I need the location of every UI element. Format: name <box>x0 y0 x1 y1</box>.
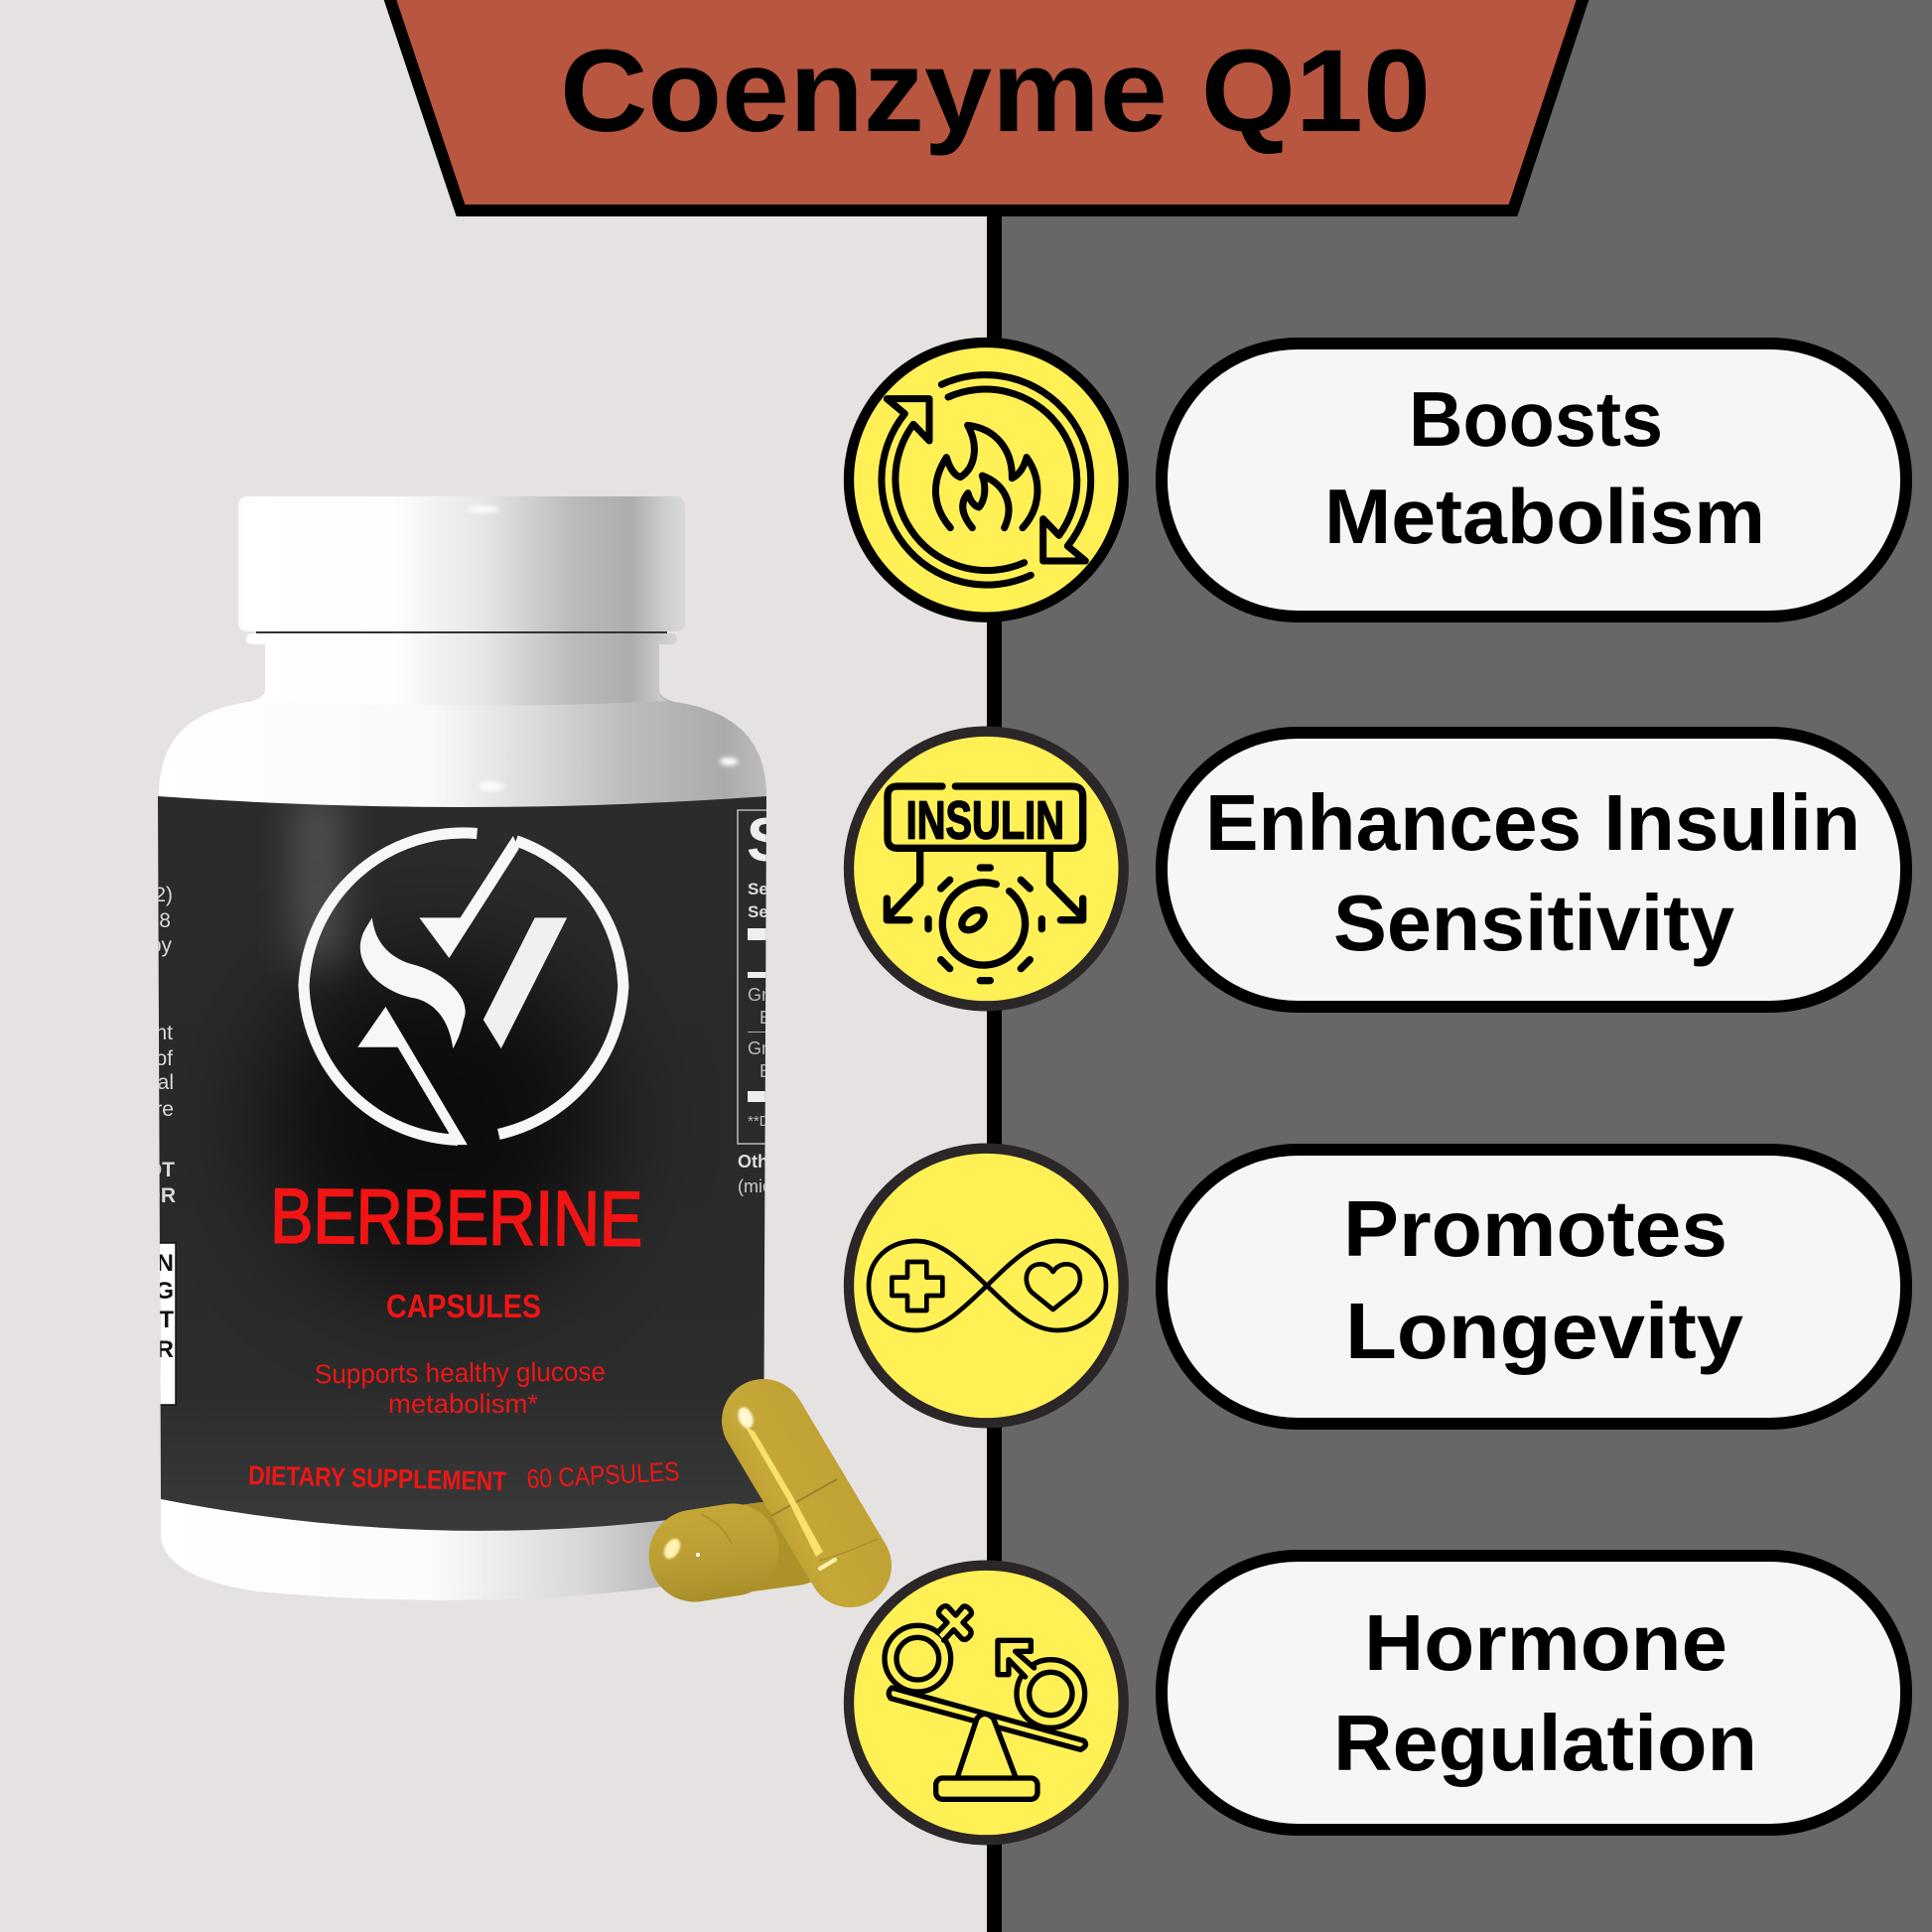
benefit pill: hormone regulation: Hormone <box>1364 1598 1727 1687</box>
side label text: left: nt <box>155 1022 173 1044</box>
benefit pill: hormone regulation: Regulation <box>1333 1699 1757 1787</box>
label <box>158 796 766 1531</box>
side label text: left: 2) <box>154 884 173 906</box>
benefit pill: promotes longevity <box>1162 1150 1906 1424</box>
product claim: metabolism* <box>388 1389 538 1419</box>
side label text: left: -8 <box>152 909 171 932</box>
supplement facts panel: Ser <box>748 902 775 921</box>
supplement facts panel: E <box>759 1008 771 1028</box>
benefit pill: promotes longevity: Longevity <box>1345 1287 1744 1375</box>
side label warning box: T <box>159 1307 174 1333</box>
title: Coenzyme Q10 <box>560 26 1431 157</box>
dietary supplement line: DIETARY SUPPLEMENT <box>248 1460 507 1496</box>
icon badge: longevity infinity <box>849 1149 1124 1423</box>
supplement facts panel: **D <box>748 1113 770 1130</box>
side label warning box: R <box>157 1336 174 1363</box>
side label warning box: G <box>155 1278 174 1305</box>
capsule count: 60 CAPSULES <box>526 1456 680 1494</box>
product form: CAPSULES <box>386 1288 541 1324</box>
benefit pill: enhances insulin sensitivity <box>1162 733 1906 1007</box>
bottle body <box>159 645 766 1600</box>
icon badge: hormone balance <box>849 1566 1124 1840</box>
brand logo <box>304 833 623 1145</box>
bottle base <box>161 1489 763 1600</box>
icon badge: insulin: INSULIN <box>906 790 1064 850</box>
benefit pill: boosts metabolism: Boosts <box>1409 375 1663 463</box>
large capsule <box>736 1405 878 1569</box>
title banner <box>386 0 1587 210</box>
side label warning box <box>159 1242 177 1406</box>
supplement facts panel: E <box>759 1061 771 1081</box>
icon badge: metabolism fire cycle <box>849 343 1124 618</box>
benefit pill: hormone regulation <box>1162 1556 1906 1830</box>
supplement facts panel: Othe <box>738 1152 778 1172</box>
background: light left side <box>0 0 993 1932</box>
bottle highlights <box>468 506 738 791</box>
bottle neck <box>256 643 667 706</box>
supplement facts panel: Gra <box>748 985 778 1005</box>
product claim: Supports healthy glucose <box>315 1357 606 1389</box>
side label text: left: DT <box>147 1159 175 1181</box>
small capsule <box>660 1514 794 1562</box>
side label text: left: re <box>155 1098 174 1121</box>
side label text: left: of <box>155 1047 173 1070</box>
supplement facts panel: S <box>747 806 787 875</box>
central vertical divider <box>987 199 1002 1932</box>
side label text: left: cal <box>147 1071 174 1094</box>
icon badge: insulin <box>849 732 1124 1006</box>
side label text: left: py <box>150 934 172 957</box>
product: supplement bottle <box>145 496 787 1600</box>
benefit pill: enhances insulin sensitivity: Sensitivity <box>1333 879 1735 967</box>
side label warning box: N <box>157 1250 174 1277</box>
background: dark right side <box>993 0 1932 1932</box>
capsules <box>660 1405 878 1569</box>
supplement facts panel: Ser <box>748 880 775 898</box>
benefit pill: promotes longevity: Promotes <box>1343 1184 1727 1273</box>
benefit pill: boosts metabolism: Metabolism <box>1324 473 1765 560</box>
product claim <box>315 1357 606 1419</box>
supplement facts panel: Gra <box>748 1038 778 1058</box>
bottle cap <box>238 496 685 631</box>
supplement facts panel: (mic <box>738 1176 771 1196</box>
cap shadow line <box>256 631 667 633</box>
side label text: left: OR <box>145 1184 176 1207</box>
product name: BERBERINE <box>270 1172 643 1263</box>
bottle lip <box>246 633 677 644</box>
benefit pill: enhances insulin sensitivity: Enhances Insulin <box>1205 778 1861 867</box>
supplement facts panel <box>737 809 766 1196</box>
benefit pill: boosts metabolism <box>1162 344 1906 617</box>
side label text: left <box>159 886 175 1202</box>
